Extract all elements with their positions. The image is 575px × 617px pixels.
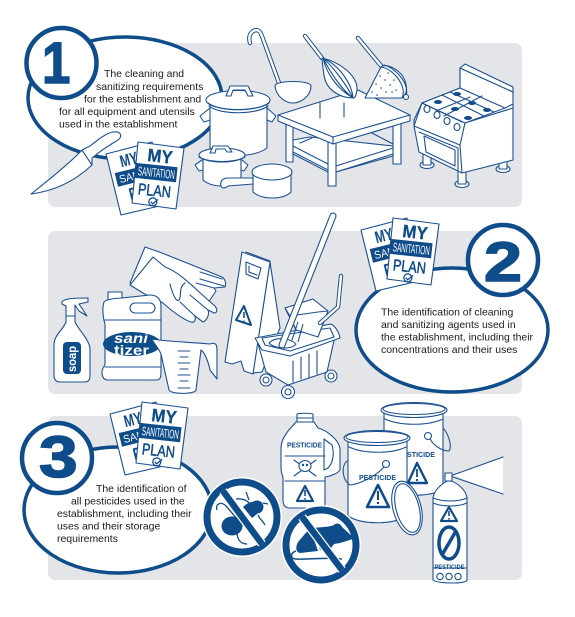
icon: ladle — [249, 30, 311, 103]
icon: pesticide spray can — [433, 473, 467, 583]
callout 2: oval — [356, 268, 548, 392]
icon: wet floor sign — [225, 252, 280, 374]
callout 3: oval — [24, 447, 212, 573]
badge: number 1 — [26, 28, 96, 98]
icon: pesticide paint can (back): STICIDE — [407, 450, 435, 459]
document: My Sanitation Plan (step 1): SANITATION — [137, 164, 175, 182]
text block: step 2: concentrations and their uses — [381, 345, 517, 356]
document: My Sanitation Plan (step 3): SANITATION — [141, 424, 179, 442]
document: My Sanitation Plan (step 2): MY — [402, 221, 429, 244]
document: My Sanitation Plan (step 3): MY — [122, 408, 144, 431]
icon: spray lines — [453, 457, 503, 494]
document: My Sanitation Plan (step 2): PL — [382, 258, 402, 280]
icon: chef knife — [31, 132, 121, 194]
icon: saucepan — [221, 164, 292, 198]
document: My Sanitation Plan (step 3): MY — [151, 405, 178, 428]
badge: number 3: 3 — [39, 424, 78, 490]
icon: measuring cup — [152, 339, 217, 393]
icon: mop bucket and wringer — [255, 216, 341, 398]
badge: number 2: 2 — [484, 231, 522, 294]
badge: number 3 — [22, 423, 92, 493]
icon: strainer — [358, 38, 408, 100]
icon: poison bottle: PESTICIDE — [287, 442, 322, 450]
icon: pesticide paint can (front): PESTICIDE — [359, 473, 396, 482]
document: My Sanitation Plan (step 2): MY — [373, 224, 395, 247]
text block: step 1: used in the establishment — [59, 120, 177, 130]
text block: step 1: The cleaning and — [104, 69, 184, 80]
icon: no insects sign — [202, 477, 282, 557]
panel: cleaning agents background — [48, 231, 522, 394]
icon: large stock pot — [200, 86, 276, 156]
icon: whisk — [305, 36, 357, 98]
callout 1: oval — [28, 37, 222, 159]
icon: can lid — [386, 478, 428, 538]
icon: soap spray bottle — [54, 298, 90, 382]
icon: pesticide paint can (front) — [343, 430, 410, 523]
document: My Sanitation Plan (step 3): PLAN — [141, 441, 176, 462]
document: My Sanitation Plan (step 3): PL — [131, 442, 151, 464]
text block: step 3: all pesticides used in the — [71, 496, 185, 508]
document: My Sanitation Plan (step 1): MY — [147, 145, 174, 168]
document: My Sanitation Plan (step 2): SANITATION — [392, 240, 430, 258]
document: My Sanitation Plan (step 1): PLAN — [137, 181, 172, 202]
icon: rubber gloves — [130, 247, 226, 322]
icon: poison bottle — [281, 413, 340, 508]
document: My Sanitation Plan (step 1) — [106, 142, 184, 215]
text block: step 2: the establishment, including their — [381, 332, 534, 344]
icon: pesticide spray can: PESTICIDE — [434, 564, 465, 571]
panel: cleaning requirements background — [48, 43, 522, 207]
icon: spray cone — [453, 457, 503, 494]
icon: sanitizer jug — [102, 292, 161, 380]
text block: step 2: The identification of cleaning — [381, 307, 513, 318]
icon: soap spray bottle: soap — [67, 346, 79, 372]
icon: stove with oven — [414, 64, 513, 188]
document: My Sanitation Plan (step 3) — [110, 402, 188, 475]
text block: step 3: requirements — [57, 534, 118, 545]
icon: small pot with lid — [195, 146, 248, 186]
icon: sanitizer jug: sani — [114, 330, 149, 346]
document: My Sanitation Plan (step 3): SANIT — [122, 427, 154, 446]
document: My Sanitation Plan (step 1): MY — [118, 148, 140, 171]
icon: steel table — [278, 90, 410, 186]
text block: step 3: The identification of — [96, 484, 187, 495]
text block: step 3: uses and their storage — [57, 522, 160, 532]
badge: number 1: 1 — [42, 31, 70, 96]
panel: pesticides background — [48, 416, 522, 580]
text block: step 1: sanitizing requirements — [96, 82, 203, 93]
text block: step 1: for the establishment and — [84, 94, 201, 106]
document: My Sanitation Plan (step 2): SANIT — [373, 243, 405, 262]
document: My Sanitation Plan (step 2): PLAN — [392, 257, 427, 278]
icon: pesticide paint can (back) — [381, 402, 450, 495]
text block: step 2: and sanitizing agents used in — [381, 320, 516, 331]
document: My Sanitation Plan (step 2) — [361, 218, 439, 291]
badge: number 2 — [468, 225, 538, 295]
text block: step 1: for all equipment and utensils — [59, 107, 195, 118]
icon: sanitizer jug: tizer — [114, 342, 150, 358]
text block: step 3: establishment, including their — [57, 509, 192, 520]
document: My Sanitation Plan (step 1): PL — [127, 182, 147, 204]
document: My Sanitation Plan (step 1): SANIT — [118, 167, 150, 186]
icon: no rodents sign — [281, 505, 361, 585]
